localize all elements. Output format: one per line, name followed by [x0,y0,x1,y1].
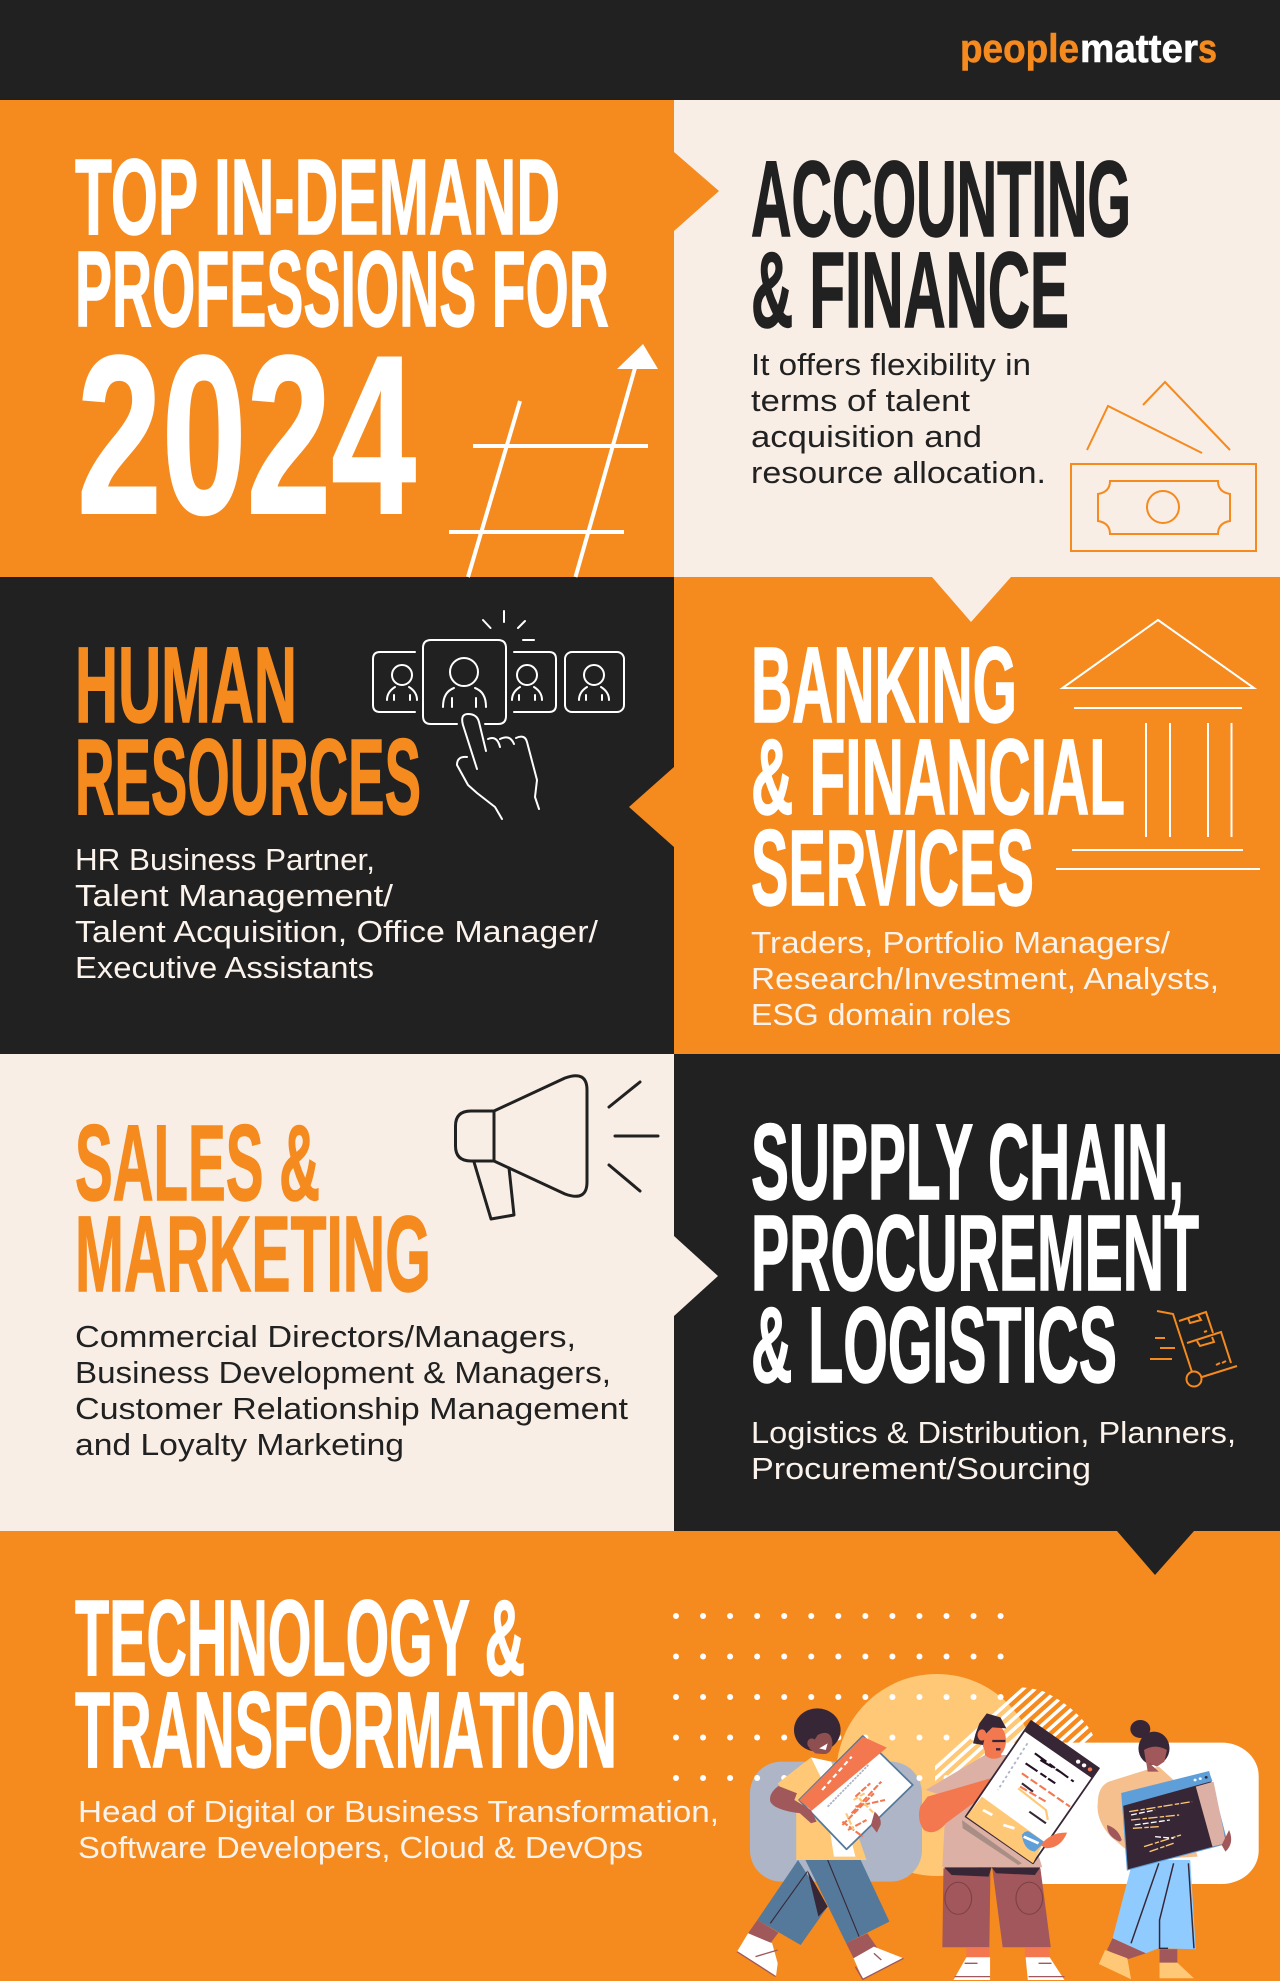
panel: accounting and finance [674,100,1280,622]
panel: human resources [0,577,674,1054]
description: accounting: resource allocation. [751,455,1046,490]
person 3 [1113,1860,1196,1953]
icon: banknote and envelope [1071,382,1256,551]
heading: banking and financial services [751,624,1125,928]
panel: banking and financial services [629,577,1280,1054]
description: supply chain roles: Procurement/Sourcing [751,1451,1091,1486]
description: banking roles [751,925,1219,1032]
logo: peoplematters [960,27,1217,71]
logo: peoplematters: matter [1080,27,1198,71]
logo: peoplematters: s [1198,27,1217,71]
header bar [0,0,1280,100]
description: sales roles [75,1319,628,1462]
description: technology roles: Head of Digital or Business Transformation, [78,1794,719,1829]
description: HR roles: Executive Assistants [75,950,374,985]
description: accounting: terms of talent [751,383,970,418]
description: supply chain roles: Logistics & Distribution, Planners, [751,1415,1236,1450]
description: accounting: acquisition and [751,419,982,454]
person 2 [942,1868,990,1947]
description: sales roles: Customer Relationship Management [75,1391,628,1426]
description: HR roles: HR Business Partner, [75,842,375,877]
description: banking roles: Research/Investment, Analysts, [751,961,1219,996]
description: banking roles: Traders, Portfolio Managers/ [751,925,1170,960]
title: top in-demand professions for [75,136,609,349]
description: accounting: It offers flexibility in [751,347,1031,382]
description: HR roles: Talent Management/ [75,878,393,913]
heading: sales and marketing [75,1102,431,1314]
icon: selecting a candidate card [373,611,624,819]
panel: title [0,100,719,577]
description: sales roles: and Loyalty Marketing [75,1427,404,1462]
description: HR roles: Talent Acquisition, Office Manager/ [75,914,598,949]
heading: supply chain, procurement and logistics [751,1101,1199,1405]
description: sales roles: Business Development & Managers, [75,1355,611,1390]
panel: supply chain, procurement and logistics [674,1054,1280,1575]
description: supply chain roles [751,1415,1236,1486]
description: technology roles [78,1794,719,1865]
heading: technology and transformation [75,1577,617,1790]
panel: technology and transformation [0,1531,1280,1981]
heading: accounting and finance [751,138,1131,350]
icon: ladder with arrow [449,344,658,577]
panel: sales and marketing [0,1054,718,1531]
description: sales roles: Commercial Directors/Managers, [75,1319,576,1354]
description: technology roles: Software Developers, Cloud & DevOps [78,1830,643,1865]
logo: peoplematters: people [960,27,1079,71]
description: accounting [751,347,1046,490]
description: banking roles: ESG domain roles [751,997,1011,1032]
heading: human resources [75,624,421,837]
illustration: three developers with tablets [672,1612,1259,1980]
icon: megaphone [456,1076,658,1219]
icon: hand truck with boxes [1150,1311,1237,1386]
description: HR roles [75,842,598,985]
icon: bank building [1056,620,1260,869]
person 1 [757,1860,828,1945]
